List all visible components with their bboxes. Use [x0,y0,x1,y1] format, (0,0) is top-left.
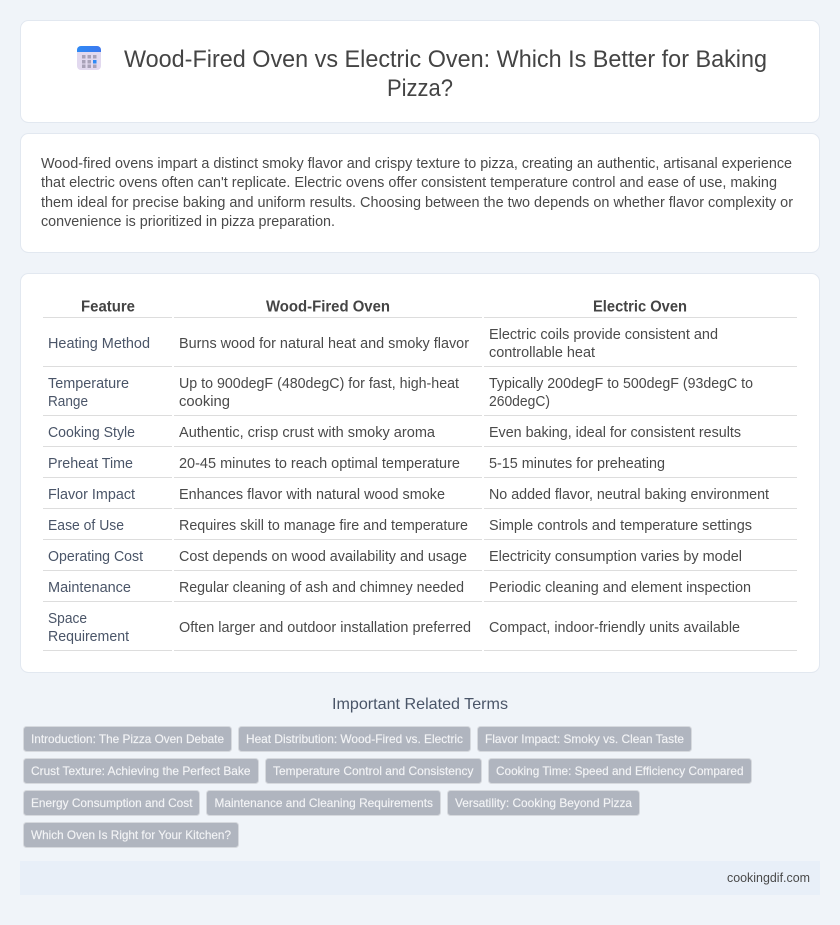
row: operating cost [43,549,797,571]
tag [24,822,238,848]
row: space requirement: Requirement [48,629,129,645]
tag [24,790,200,816]
tag [448,790,640,816]
tag [478,726,692,752]
row: space requirement: Compact, indoor-friendly units available [489,620,740,636]
tag: Maintenance and Cleaning Requirements [214,796,433,810]
tag [206,790,440,816]
row: heating method: controllable heat [489,345,595,361]
title [124,46,767,102]
row: cooking style: Cooking Style [48,425,135,441]
row: preheat time: 5-15 minutes for preheating [489,456,665,472]
row: preheat time [43,456,797,478]
row: cooking style [43,425,797,447]
row: flavor impact [43,487,797,509]
tag [488,758,752,784]
row: ease of use: Ease of Use [48,518,124,534]
panel: intro text: them ideal for precise baking and uniform results. Choosing between the two depends on whether flavor complexity or [41,195,793,211]
tag: Cooking Time: Speed and Efficiency Compared [496,764,744,778]
row: temperature range: Temperature [48,376,129,392]
row: operating cost: Electricity consumption varies by model [489,549,742,565]
icon: calendar [77,46,101,70]
table header: Wood-Fired Oven [266,298,390,316]
row: ease of use: Simple controls and temperature settings [489,518,752,534]
row: maintenance: Periodic cleaning and element inspection [489,580,751,596]
row: temperature range: 260degC) [489,394,550,410]
tag: Temperature Control and Consistency [273,764,474,778]
footer: cookingdif.com [727,870,810,885]
row: preheat time: Preheat Time [48,456,133,472]
row: ease of use [43,518,797,540]
row: space requirement: Space [48,611,87,627]
panel: comparison table [20,274,820,672]
row: temperature range: cooking [179,394,230,410]
row: heating method [43,327,797,367]
row: maintenance [43,580,797,602]
tag [238,726,470,752]
footer [20,861,820,895]
row: heating method: Burns wood for natural heat and smoky flavor [179,336,469,352]
row: maintenance: Maintenance [48,580,131,596]
row: temperature range: Up to 900degF (480degC) for fast, high-heat [179,376,459,392]
tag [24,726,232,752]
row: temperature range [43,376,797,416]
heading: important related terms: Important Related Terms [332,696,508,713]
row: operating cost: Cost depends on wood availability and usage [179,549,467,565]
tag: Energy Consumption and Cost [31,796,193,810]
row: flavor impact: No added flavor, neutral baking environment [489,487,769,503]
row: temperature range: Range [48,394,88,410]
table header: Feature [81,298,135,316]
row: space requirement [43,611,797,651]
row: maintenance: Regular cleaning of ash and chimney needed [179,580,464,596]
title: Wood-Fired Oven vs Electric Oven: Which Is Better for Baking [124,46,767,73]
panel: related term tags [24,726,752,848]
row: ease of use: Requires skill to manage fire and temperature [179,518,468,534]
tag [24,758,258,784]
tag: Versatility: Cooking Beyond Pizza [455,796,632,810]
row: heating method: Heating Method [48,336,150,352]
panel: intro text: that electric ovens often can't replicate. Electric ovens offer consistent temperature control and ease of use, making [41,175,777,191]
tag: Heat Distribution: Wood-Fired vs. Electric [246,732,463,746]
panel: intro text [20,134,820,252]
tag [266,758,482,784]
panel: header [20,20,820,122]
row: heating method: Electric coils provide consistent and [489,327,718,343]
title: Pizza? [387,75,453,102]
row: flavor impact: Flavor Impact [48,487,135,503]
panel: intro text: Wood-fired ovens impart a distinct smoky flavor and crispy texture to pizza, creating an authentic, artisanal experience [41,156,792,172]
tag: Crust Texture: Achieving the Perfect Bake [31,764,251,778]
row: preheat time: 20-45 minutes to reach optimal temperature [179,456,460,472]
row: cooking style: Authentic, crisp crust with smoky aroma [179,425,435,441]
tag: Introduction: The Pizza Oven Debate [31,732,224,746]
row: operating cost: Operating Cost [48,549,143,565]
table header: Electric Oven [593,298,687,316]
tag: Which Oven Is Right for Your Kitchen? [31,828,231,842]
row: flavor impact: Enhances flavor with natural wood smoke [179,487,445,503]
row: space requirement: Often larger and outdoor installation preferred [179,620,471,636]
tag: Flavor Impact: Smoky vs. Clean Taste [485,732,684,746]
panel: intro text: convenience is prioritized in pizza preparation. [41,214,335,230]
table header [43,298,797,318]
row: cooking style: Even baking, ideal for consistent results [489,425,741,441]
row: temperature range: Typically 200degF to 500degF (93degC to [489,376,753,392]
